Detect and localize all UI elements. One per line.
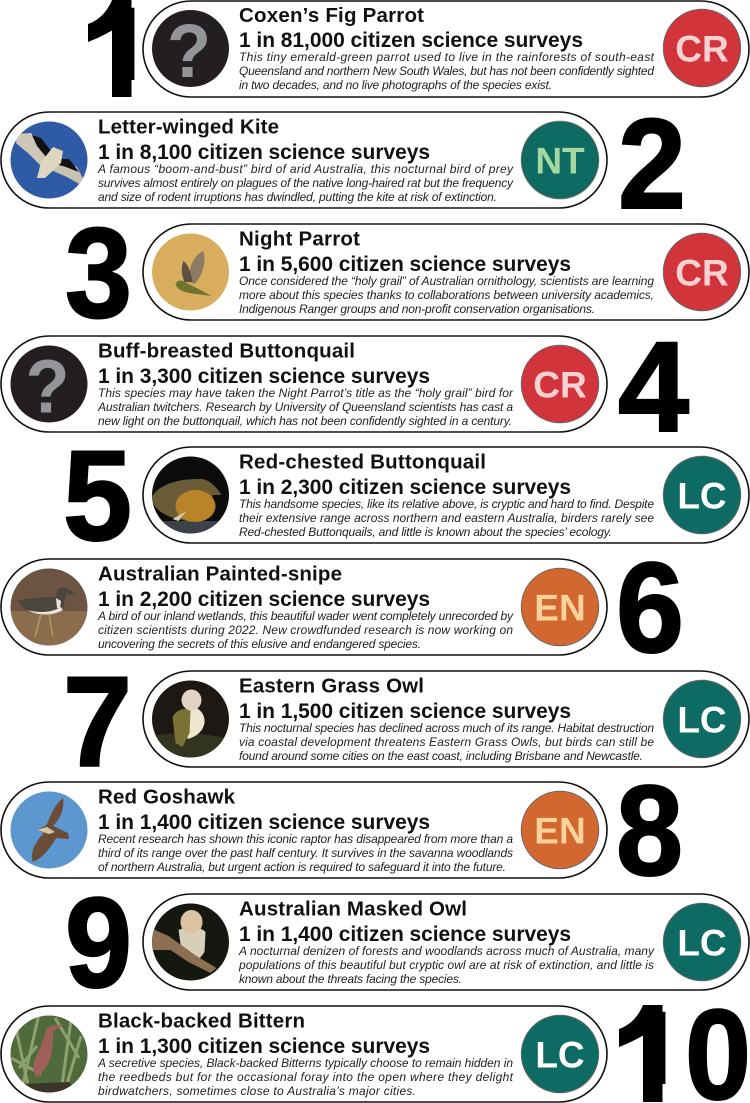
description: uncovering the secrets of this elusive and endangered species. — [98, 637, 421, 651]
description: Australian twitchers. Research by University of Queensland scientists has cast a — [97, 400, 513, 414]
description: This handsome species, like its relative above, is cryptic and hard to find. Despite — [239, 497, 654, 511]
description: in two decades, and no live photographs of the species exist. — [239, 78, 552, 92]
pill panel — [1, 1006, 607, 1102]
icon: unknown photo question mark: ? — [167, 9, 211, 94]
description: Red-chested Buttonquails, and little is known about the species’ ecology. — [239, 525, 612, 539]
species name: Red-chested Buttonquail — [239, 450, 486, 474]
rank number 3: 3 — [65, 202, 132, 345]
description: found around some cities on the east coast, including Brisbane and Newcastle. — [239, 749, 643, 763]
survey frequency: 1 in 8,100 citizen science surveys — [98, 141, 430, 164]
entry 4: Buff-breasted Buttonquail — [0, 335, 690, 433]
pill panel — [143, 1, 749, 97]
description — [239, 50, 655, 92]
photo: bittern — [9, 1014, 89, 1094]
pill panel — [1, 112, 607, 208]
entry 1: Coxen's Fig Parrot — [88, 0, 750, 98]
status badge LC: LC — [677, 476, 727, 516]
description: populations of this beautiful but cryptic owl are at risk of extinction, and little is — [238, 958, 654, 972]
status badge CR: CR — [675, 252, 729, 294]
description — [97, 386, 514, 428]
survey frequency: 1 in 3,300 citizen science surveys — [98, 365, 430, 388]
status badge LC — [521, 1015, 599, 1093]
icon: unknown photo question mark — [10, 346, 88, 422]
description: and size of rodent irruptions has dwindled, putting the kite at risk of extinction. — [98, 190, 497, 204]
survey frequency: 1 in 1,400 citizen science surveys — [98, 811, 430, 834]
species name: Eastern Grass Owl — [239, 674, 424, 698]
entry 9: Australian Masked Owl — [68, 893, 750, 991]
entry 3: Night Parrot — [66, 223, 750, 321]
description: the reedbeds but for the occasional foray into the open where they delight — [98, 1070, 514, 1084]
description — [239, 274, 654, 316]
description — [239, 497, 654, 539]
species name: Red Goshawk — [98, 786, 236, 808]
survey frequency: 1 in 81,000 citizen science surveys — [239, 29, 583, 52]
description: known about the threats facing the species. — [239, 972, 462, 986]
photo: goshawk — [9, 790, 89, 870]
photo: night parrot — [150, 232, 230, 312]
rank number 9: 9 — [65, 872, 132, 1015]
description: birdwatchers, sometimes close to Australia’s major cities. — [98, 1084, 416, 1098]
description: A nocturnal denizen of forests and woodlands across much of Australia, many — [238, 944, 655, 958]
status badge CR — [663, 233, 741, 311]
status badge EN — [521, 791, 599, 869]
description: citizen scientists during 2022. New crowdfunded research is now working on — [98, 623, 513, 637]
status badge LC — [663, 903, 741, 981]
description — [98, 832, 513, 874]
pill panel — [143, 894, 749, 990]
species name: Australian Painted-snipe — [98, 562, 342, 586]
status badge CR: CR — [533, 364, 587, 406]
entry 5: Red-chested Buttonquail — [66, 446, 750, 544]
description: This species may have taken the Night Parrot’s title as the “holy grail” bird for — [98, 386, 514, 400]
survey frequency: 1 in 5,600 citizen science surveys — [239, 253, 571, 276]
entry 8: Red Goshawk — [0, 781, 680, 879]
rank number 6: 6 — [616, 537, 684, 680]
photo: painted-snipe — [9, 567, 89, 647]
survey frequency: 1 in 1,400 citizen science surveys — [239, 923, 571, 946]
status badge CR — [521, 345, 599, 423]
pill panel — [143, 224, 749, 320]
pill panel — [143, 671, 749, 767]
description: of northern Australia, but urgent action is required to safeguard it into the future. — [98, 860, 506, 874]
survey frequency: 1 in 2,200 citizen science surveys — [98, 588, 430, 611]
description — [239, 721, 654, 763]
description: via coastal development threatens Eastern Grass Owls, but birds can still be — [239, 735, 654, 749]
rank number 10 — [609, 984, 750, 1103]
species name: Buff-breasted Buttonquail — [98, 340, 355, 362]
species name: Coxen’s Fig Parrot — [239, 4, 424, 27]
description — [238, 944, 655, 986]
survey frequency: 1 in 2,300 citizen science surveys — [239, 476, 571, 499]
description — [97, 609, 514, 651]
description: A famous “boom-and-bust” bird of arid Australia, this nocturnal bird of prey — [97, 162, 514, 176]
entry 10: Black-backed Bittern — [0, 1005, 748, 1103]
description: Queensland and northern New South Wales, but has not been confidently sighted — [239, 64, 654, 78]
photo: buttonquail — [150, 455, 230, 535]
status badge LC — [663, 680, 741, 758]
status badge EN — [521, 568, 599, 646]
entry 6: Australian Painted-snipe — [0, 558, 680, 656]
rank number 7: 7 — [63, 651, 132, 794]
status badge LC — [663, 456, 741, 534]
description: Indigenous Ranger groups and non-profit conservation organisations. — [239, 302, 595, 316]
description — [97, 1056, 514, 1098]
species name: Black-backed Bittern — [98, 1010, 305, 1032]
rank number 8: 8 — [616, 760, 683, 903]
pill panel — [1, 336, 607, 432]
status badge EN: EN — [534, 810, 586, 852]
description: This tiny emerald-green parrot used to live in the rainforests of south-east — [239, 50, 655, 64]
status badge NT — [521, 121, 599, 199]
description: Once considered the “holy grail” of Australian ornithology, scientists are learning — [239, 274, 654, 288]
survey frequency: 1 in 1,300 citizen science surveys — [98, 1035, 430, 1058]
status badge LC: LC — [677, 700, 727, 740]
pill panel — [143, 447, 749, 543]
description: A bird of our inland wetlands, this beautiful wader went completely unrecorded by — [97, 609, 514, 623]
description: A secretive species, Black-backed Bitterns typically choose to remain hidden in — [97, 1056, 513, 1070]
description: third of its range over the past half century. It survives in the savanna woodlands — [98, 846, 513, 860]
entry 2: Letter-winged Kite — [0, 111, 682, 209]
icon: unknown photo question mark: ? — [26, 344, 70, 430]
species name: Letter-winged Kite — [98, 116, 279, 138]
species name: Australian Masked Owl — [239, 898, 467, 920]
pill panel — [1, 782, 607, 878]
status badge LC: LC — [535, 1034, 585, 1076]
description: This nocturnal species has declined across much of its range. Habitat destruction — [239, 721, 654, 735]
status badge CR — [663, 9, 741, 87]
description: Recent research has shown this iconic raptor has disappeared from more than a — [98, 832, 513, 846]
status badge EN: EN — [534, 588, 586, 628]
photo: kite — [9, 120, 89, 200]
description: survives almost entirely on plagues of the native long-haired rat but the frequency — [98, 176, 514, 190]
pill panel — [1, 559, 607, 655]
species name: Night Parrot — [239, 228, 360, 250]
description: new light on the buttonquail, which has not been confidently sighted in a century. — [98, 414, 512, 428]
photo: masked owl — [150, 902, 230, 982]
description — [97, 162, 514, 204]
status badge CR: CR — [675, 28, 729, 70]
rank number 2: 2 — [618, 93, 686, 236]
entry 7: Eastern Grass Owl — [67, 670, 750, 768]
description: more about this species thanks to collaborations between university academics, — [239, 288, 654, 302]
survey frequency: 1 in 1,500 citizen science surveys — [239, 700, 571, 723]
description: their extensive range across northern and eastern Australia, birders rarely see — [239, 511, 654, 525]
rank number 4: 4 — [618, 316, 689, 459]
icon: unknown photo question mark — [152, 10, 229, 87]
photo: grass owl — [150, 679, 230, 759]
status badge LC: LC — [677, 922, 727, 964]
rank number 5: 5 — [63, 425, 132, 568]
status badge NT: NT — [535, 140, 585, 182]
